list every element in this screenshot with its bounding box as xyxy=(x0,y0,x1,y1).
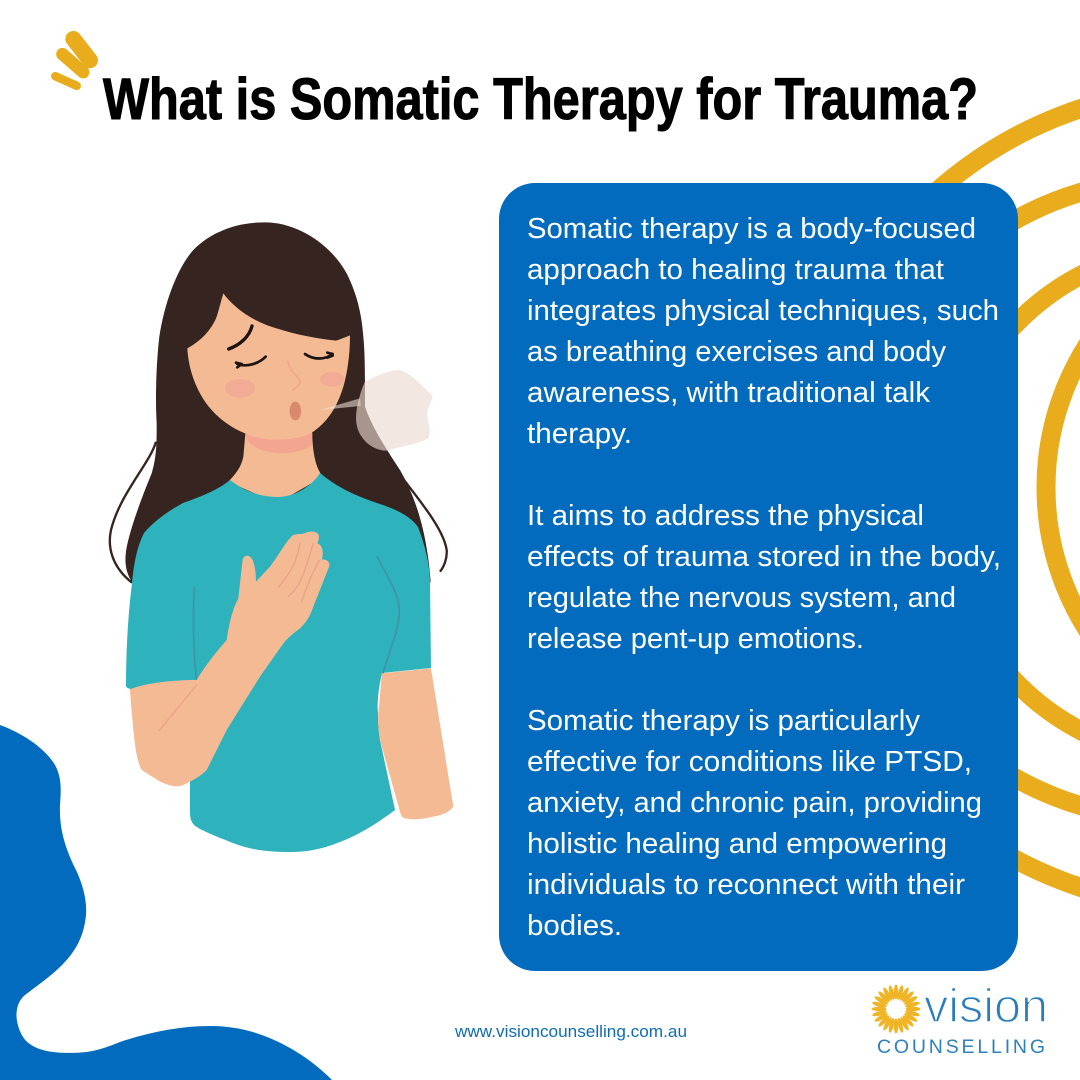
text block: paragraph 1: Somatic therapy is a body-focused xyxy=(527,213,976,245)
text block: paragraph 3: holistic healing and empowering xyxy=(527,828,947,860)
decorative concentric yellow rings xyxy=(799,88,1080,908)
icon: sunburst xyxy=(872,984,920,1034)
logo wordmark: vision xyxy=(924,979,1048,1032)
text block: paragraph 1: integrates physical techniques, such xyxy=(527,295,999,327)
mouth xyxy=(290,402,301,420)
text block: paragraph 3: bodies. xyxy=(527,910,622,942)
hair strands xyxy=(110,442,447,583)
cheeks xyxy=(225,379,255,398)
text block: paragraph 1: awareness, with traditional talk xyxy=(527,377,931,409)
shirt xyxy=(126,473,431,852)
nose xyxy=(288,362,300,390)
text block: paragraph 1 xyxy=(527,213,999,450)
text block: paragraph 1: approach to healing trauma that xyxy=(527,254,944,286)
text block: paragraph 3: Somatic therapy is particularly xyxy=(527,705,920,737)
face xyxy=(187,293,350,439)
eyebrow xyxy=(229,326,252,349)
website url: www.visioncounselling.com.au xyxy=(454,1023,687,1041)
logo subtitle: COUNSELLING xyxy=(877,1036,1045,1058)
text block: paragraph 2: It aims to address the physical xyxy=(527,500,924,532)
text block: paragraph 3: anxiety, and chronic pain, providing xyxy=(527,787,982,819)
text block: paragraph 1: therapy. xyxy=(527,418,632,450)
illustration: woman breathing with hand on chest xyxy=(110,222,453,852)
text block: paragraph 3 xyxy=(527,705,982,942)
text block: paragraph 2 xyxy=(527,500,1001,655)
panel: description xyxy=(499,183,1018,971)
text block: paragraph 2: effects of trauma stored in the body, xyxy=(527,541,1001,573)
text block: paragraph 1: as breathing exercises and body xyxy=(527,336,946,368)
text block: paragraph 3: individuals to reconnect with their xyxy=(527,869,965,901)
text block: paragraph 3: effective for conditions like PTSD, xyxy=(527,746,972,778)
text block: paragraph 2: regulate the nervous system, and xyxy=(527,582,956,614)
icon: yellow burst accent xyxy=(50,28,101,91)
hand and arm lines xyxy=(159,543,320,731)
text block: paragraph 2: release pent-up emotions. xyxy=(527,623,864,655)
blue blob bottom left xyxy=(0,725,332,1080)
eyes xyxy=(236,353,333,367)
shirt creases and arms xyxy=(130,532,453,819)
breath cloud xyxy=(320,370,433,451)
neck xyxy=(228,430,323,503)
raised arm and hand xyxy=(130,532,329,786)
right arm xyxy=(378,668,453,819)
logo: Vision Counselling xyxy=(872,979,1048,1058)
hair back xyxy=(110,222,447,583)
